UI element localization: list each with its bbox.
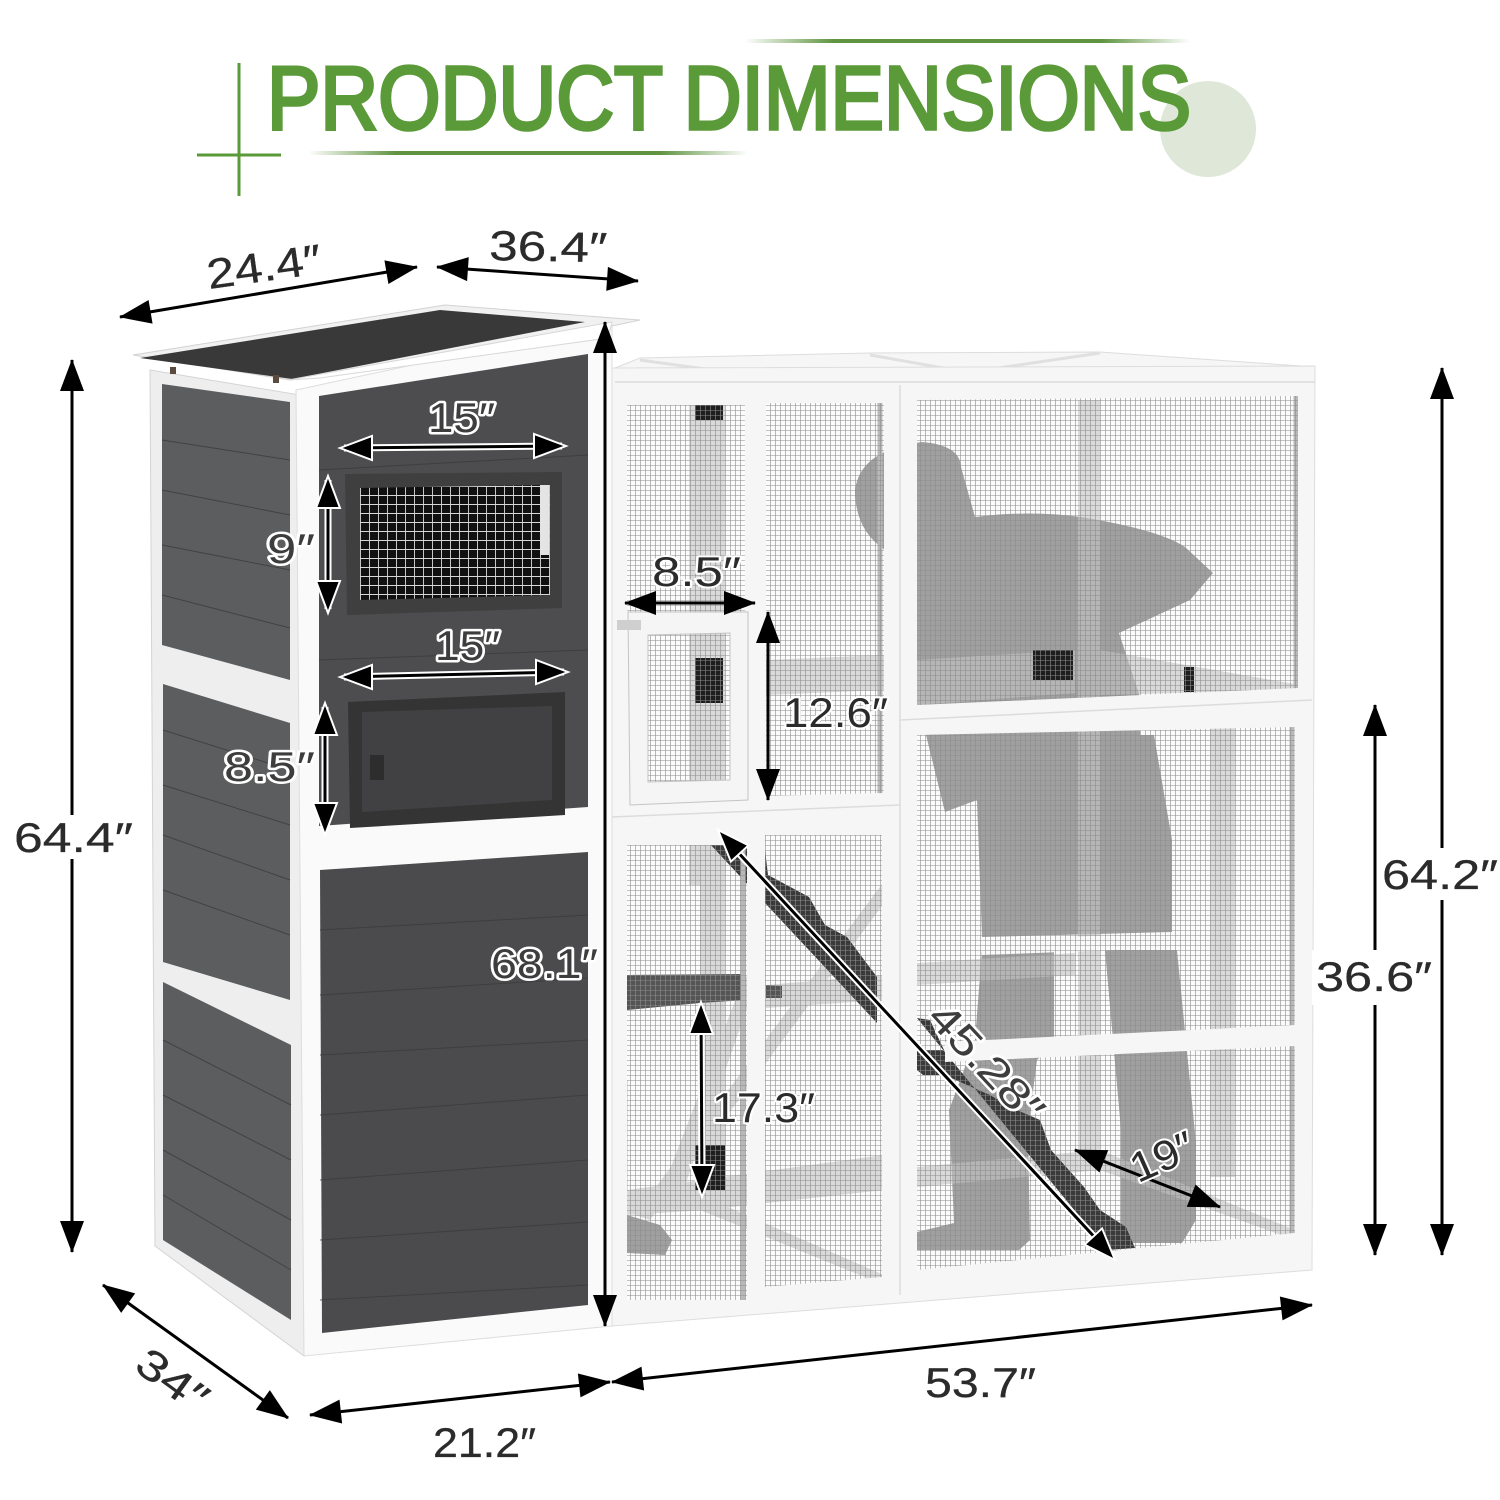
black hardware squares	[695, 405, 1194, 1190]
crosshair	[197, 63, 281, 196]
cross bar	[945, 1025, 1295, 1062]
dimension: 53.7 aviary width	[612, 1305, 1312, 1406]
dimension: 21.2 house width: 21.2″	[433, 1419, 536, 1466]
dimension: 64.4 left height	[10, 360, 138, 1252]
sliding door	[362, 706, 552, 812]
aviary roof frame	[615, 352, 1315, 380]
dimension: 8.5 cat door width	[625, 548, 755, 603]
dimension: 17.3 shelf height	[689, 1002, 815, 1197]
house front face	[296, 322, 612, 1356]
shelf	[627, 974, 745, 1010]
window frame	[345, 472, 562, 615]
dimension: 15 door width	[340, 622, 568, 689]
decorative circle	[1160, 81, 1256, 177]
front board lines	[319, 455, 588, 1300]
title rule upper	[745, 39, 1190, 43]
dimension: 36.4 top right: 36.4″	[489, 222, 608, 271]
side board lines	[162, 440, 291, 1270]
centre divider shading	[612, 382, 1315, 1295]
side panels	[162, 384, 291, 1320]
dimension: 19 aviary depth: 19″	[1122, 1122, 1202, 1192]
title text: PRODUCT DIMENSIONS	[267, 49, 1191, 149]
dimension: 53.7 aviary width: 53.7″	[925, 1359, 1036, 1406]
sliding door handle	[370, 755, 384, 780]
dimension: 34 house depth: 34″	[127, 1338, 218, 1422]
dimension: 45.28 ramp length: 45.28″	[919, 993, 1054, 1133]
ramp lower section	[917, 1018, 1135, 1250]
panel edge shading	[625, 396, 1296, 1300]
window mesh	[360, 485, 550, 600]
dimension: 19 aviary depth	[1075, 1122, 1220, 1207]
dimension: 64.2 aviary height: 64.2″	[1382, 851, 1498, 898]
roof	[133, 305, 640, 383]
dimension: 15 window width	[340, 394, 566, 460]
sliding door frame	[348, 692, 565, 828]
dimension: 64.2 aviary height	[1378, 368, 1500, 1255]
dimension: 8.5 door height: 8.5″	[224, 743, 315, 790]
dimension: 12.6 cat door height: 12.6″	[783, 689, 888, 736]
interior posts and rails	[627, 400, 1295, 1285]
dimension: 24.4 top left: 24.4″	[204, 235, 324, 298]
dimension: 8.5 cat door width: 8.5″	[652, 548, 741, 595]
dimension: 8.5 door height	[224, 703, 337, 835]
dimension: 36.6 lower height	[1312, 705, 1436, 1255]
dimension: 24.4 top left	[120, 235, 417, 317]
mesh panels with interior	[612, 380, 1312, 1310]
dimension: 21.2 house width	[310, 1382, 610, 1466]
title block	[197, 39, 1256, 196]
dimension: 36.6 lower height: 36.6″	[1316, 953, 1432, 1000]
wooden house	[133, 305, 640, 1356]
aviary frame	[612, 366, 1315, 1326]
dimension: 68.1 house height: 68.1″	[491, 940, 598, 987]
person silhouette	[627, 442, 1213, 1255]
dimension: 17.3 shelf height: 17.3″	[712, 1084, 815, 1131]
dimension: 9 window height: 9″	[267, 525, 315, 572]
lower front door	[320, 852, 588, 1333]
title rule lower	[308, 151, 748, 155]
dimension: 34 house depth	[103, 1285, 288, 1422]
dimension: 15 door width: 15″	[435, 622, 500, 669]
dimension: 9 window height	[267, 476, 340, 613]
ramp upper section	[709, 842, 877, 1023]
dimension: 64.4 left height: 64.4″	[14, 814, 133, 861]
dimension: 15 window width: 15″	[428, 394, 495, 441]
dimension: 45.28 ramp length	[718, 830, 1115, 1260]
wire mesh	[612, 380, 1312, 1310]
door frame	[628, 612, 748, 805]
aviary run	[612, 352, 1315, 1326]
dimension: 36.4 top right	[437, 222, 638, 281]
white rail	[982, 936, 1114, 955]
house side face	[150, 370, 304, 1356]
door latch	[617, 620, 641, 630]
upper front panel	[319, 354, 588, 826]
